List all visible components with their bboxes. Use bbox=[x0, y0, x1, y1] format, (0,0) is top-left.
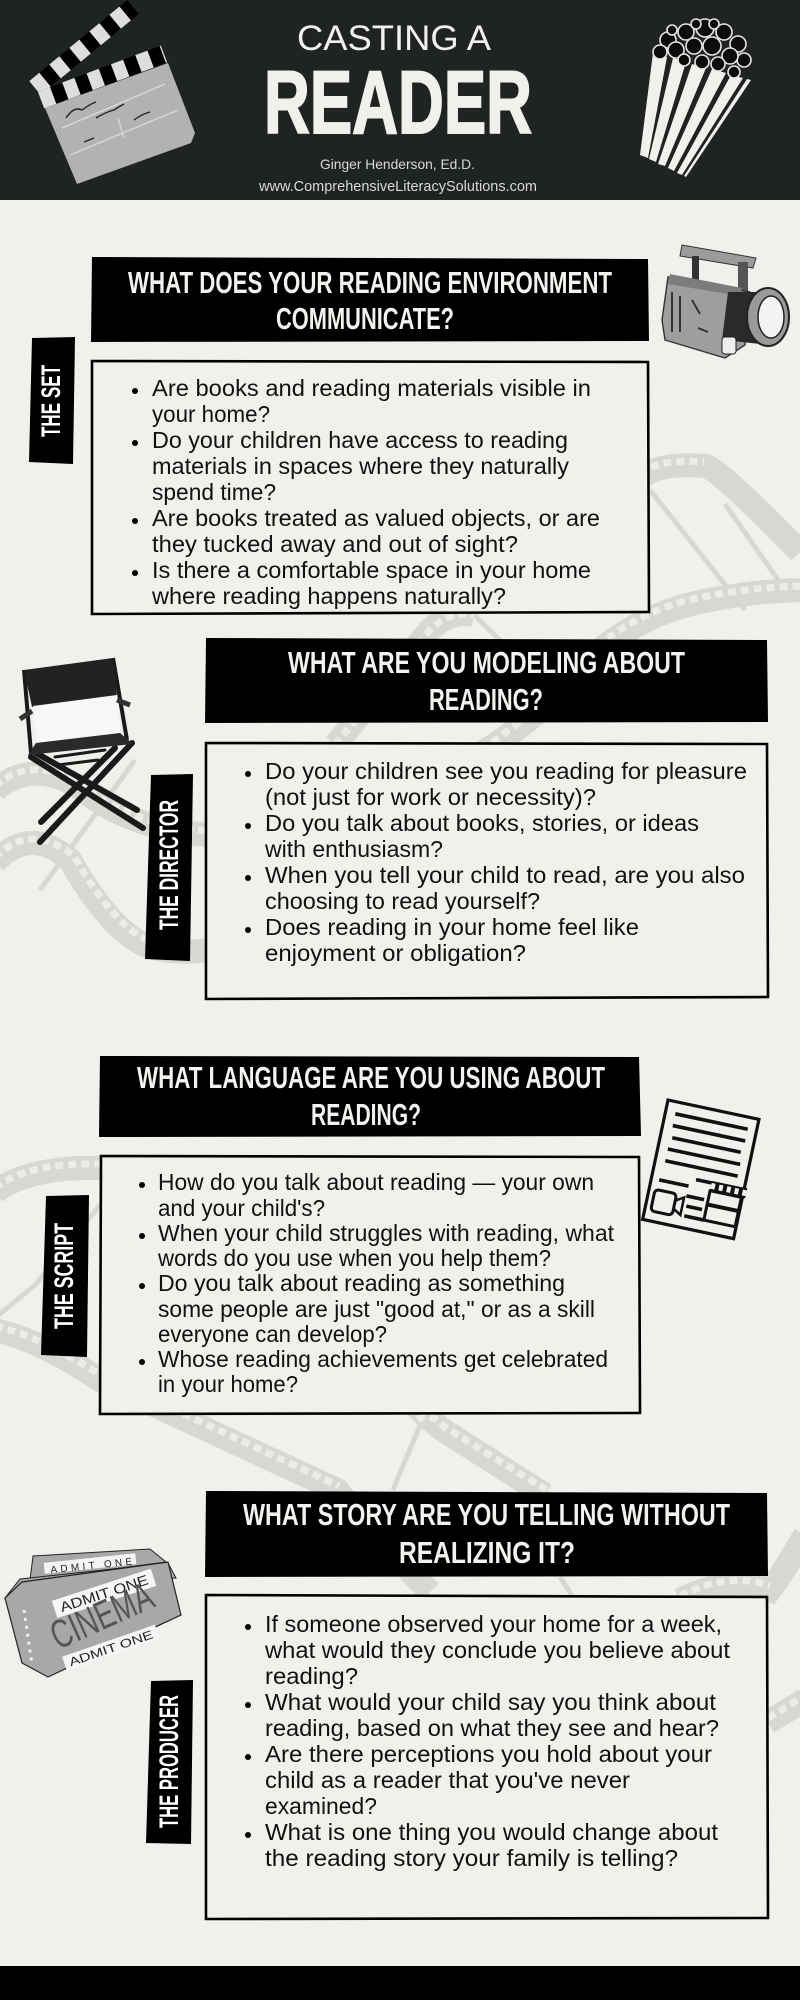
side tab: the director: THE DIRECTOR bbox=[154, 800, 184, 930]
heading bbox=[205, 1491, 768, 1577]
heading: READING? bbox=[311, 1097, 421, 1132]
heading: COMMUNICATE? bbox=[276, 301, 454, 336]
title: READER bbox=[264, 52, 532, 152]
icon: director's chair bbox=[20, 658, 143, 842]
title bbox=[264, 19, 532, 152]
question box: child as a reader that you've never bbox=[265, 1767, 630, 1793]
side tab: the set bbox=[29, 337, 75, 464]
question box: When your child struggles with reading, what bbox=[158, 1220, 615, 1246]
question box bbox=[206, 1595, 768, 1919]
question box: with enthusiasm? bbox=[264, 836, 443, 862]
question box bbox=[100, 1156, 640, 1414]
side tab: the set: THE SET bbox=[36, 365, 66, 437]
side tab: the script bbox=[41, 1195, 89, 1357]
header band bbox=[0, 0, 800, 200]
footer band bbox=[0, 1966, 800, 2000]
question box: choosing to read yourself? bbox=[265, 888, 540, 914]
side tab: the director bbox=[145, 774, 193, 961]
side tab: the producer bbox=[146, 1680, 193, 1844]
question box bbox=[92, 361, 649, 614]
icon: popcorn bbox=[640, 19, 751, 177]
question box: spend time? bbox=[152, 479, 276, 505]
question box: your home? bbox=[152, 401, 270, 427]
icon: clapperboard bbox=[35, 7, 195, 184]
section: the producer bbox=[5, 1491, 768, 1919]
question box: What is one thing you would change about bbox=[265, 1819, 719, 1845]
question box bbox=[206, 743, 768, 999]
question box: materials in spaces where they naturally bbox=[152, 453, 569, 479]
heading: WHAT DOES YOUR READING ENVIRONMENT bbox=[128, 265, 612, 300]
question box: reading, based on what they see and hear? bbox=[265, 1715, 719, 1741]
icon: script page bbox=[643, 1100, 762, 1239]
title: CASTING A bbox=[297, 19, 492, 58]
icon: film camera bbox=[662, 245, 789, 358]
question box: Do your children see you reading for pleasure bbox=[265, 758, 747, 784]
side tab: the script: THE SCRIPT bbox=[49, 1223, 79, 1329]
question box: and your child's? bbox=[158, 1195, 325, 1221]
question box: reading? bbox=[265, 1663, 358, 1689]
icon: cinema tickets: ADMIT ONE bbox=[67, 1627, 155, 1669]
question box: Are books and reading materials visible in bbox=[152, 375, 591, 401]
icon: cinema tickets bbox=[5, 1549, 181, 1677]
question box: Do you talk about books, stories, or ideas bbox=[265, 810, 699, 836]
icon: cinema tickets: ADMIT ONE bbox=[58, 1571, 150, 1615]
question box: enjoyment or obligation? bbox=[265, 940, 526, 966]
question box: Are books treated as valued objects, or are bbox=[152, 505, 600, 531]
side tab: the producer: THE PRODUCER bbox=[154, 1695, 184, 1828]
question box: Is there a comfortable space in your home bbox=[152, 557, 591, 583]
question box: words do you use when you help them? bbox=[157, 1245, 551, 1271]
question box: some people are just "good at," or as a skill bbox=[158, 1296, 595, 1322]
heading: REALIZING IT? bbox=[399, 1535, 575, 1570]
heading bbox=[91, 257, 649, 342]
heading bbox=[205, 638, 768, 723]
section: the set bbox=[29, 245, 789, 614]
question box: Are there perceptions you hold about your bbox=[265, 1741, 712, 1767]
section: the director bbox=[20, 638, 768, 999]
heading bbox=[99, 1056, 641, 1137]
author and website: Ginger Henderson, Ed.D. bbox=[320, 156, 475, 172]
author and website: www.ComprehensiveLiteracySolutions.com bbox=[258, 178, 537, 195]
question box: examined? bbox=[265, 1793, 377, 1819]
heading: READING? bbox=[429, 682, 543, 717]
heading: WHAT LANGUAGE ARE YOU USING ABOUT bbox=[137, 1060, 605, 1095]
question box: If someone observed your home for a week, bbox=[265, 1611, 722, 1637]
question box: what would they conclude you believe about bbox=[264, 1637, 731, 1663]
question box: When you tell your child to read, are you also bbox=[265, 862, 745, 888]
question box: everyone can develop? bbox=[158, 1321, 387, 1347]
section: the script bbox=[41, 1056, 762, 1414]
question box: where reading happens naturally? bbox=[151, 583, 506, 609]
question box: What would your child say you think about bbox=[265, 1689, 717, 1715]
question box: How do you talk about reading — your own bbox=[158, 1169, 594, 1195]
question box: they tucked away and out of sight? bbox=[152, 531, 518, 557]
question box: Do your children have access to reading bbox=[152, 427, 568, 453]
question box: Whose reading achievements get celebrated bbox=[158, 1346, 608, 1372]
question box: Do you talk about reading as something bbox=[158, 1270, 565, 1296]
icon: cinema tickets: ADMIT ONE bbox=[50, 1557, 133, 1576]
question box: Does reading in your home feel like bbox=[265, 914, 639, 940]
author and website bbox=[258, 156, 537, 195]
question box: (not just for work or necessity)? bbox=[265, 784, 596, 810]
question box: the reading story your family is telling? bbox=[265, 1845, 678, 1871]
icon: cinema tickets: CINEMA bbox=[44, 1574, 161, 1658]
question box: in your home? bbox=[158, 1371, 298, 1397]
